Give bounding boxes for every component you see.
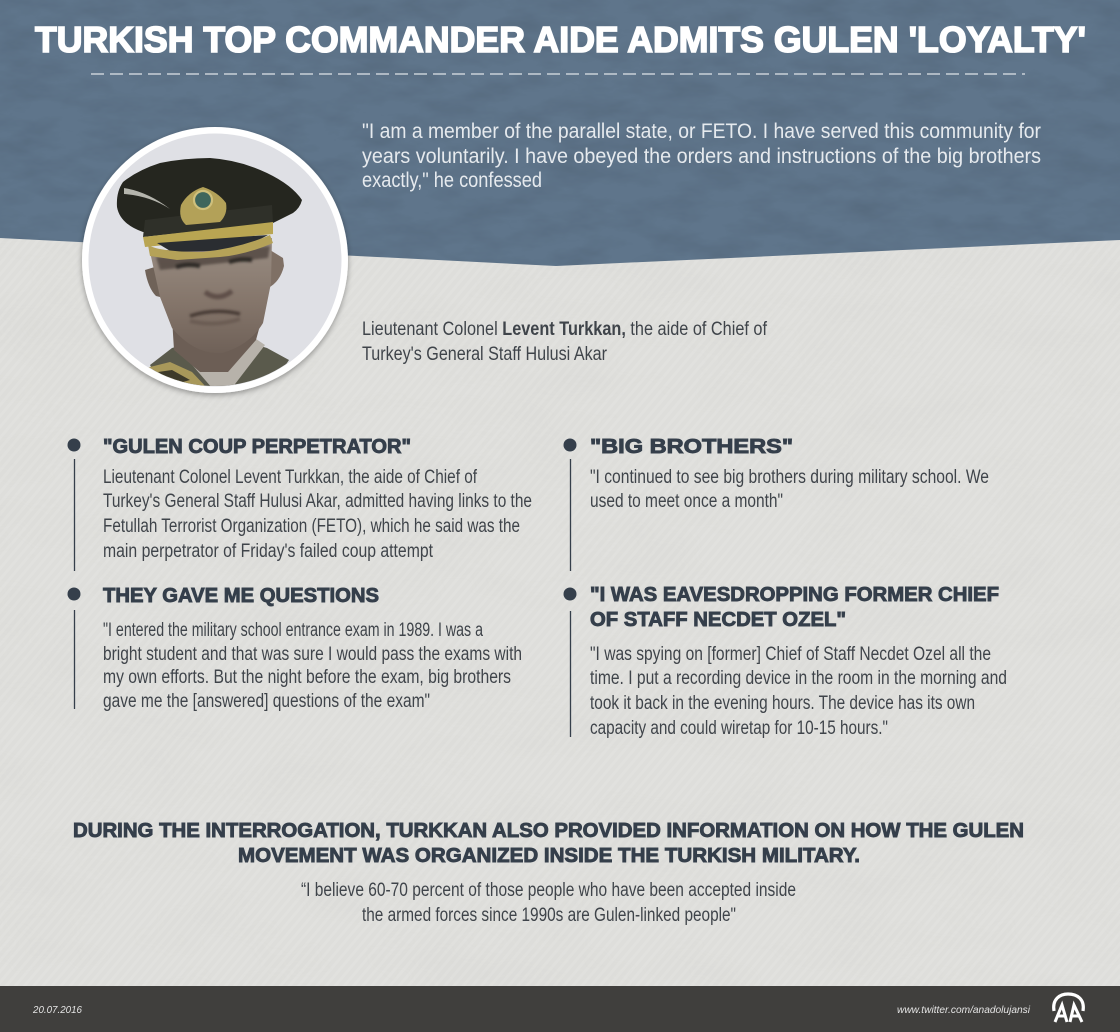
body text: capacity and could wiretap for 10-15 hours." [590, 718, 888, 739]
body text: used to meet once a month" [590, 491, 783, 512]
heading: "BIG BROTHERS" [590, 436, 793, 458]
body text [590, 467, 989, 512]
head [150, 238, 272, 340]
uniform shoulders [150, 347, 289, 386]
bullet marker [68, 588, 80, 600]
body text: Lieutenant Colonel Levent Turkkan, the aide of Chief of [103, 467, 478, 488]
body text: my own efforts. But the night before the exam, big brothers [103, 667, 511, 688]
twitter url: www.twitter.com/anadolujansi [897, 1005, 1031, 1016]
body text: took it back in the evening hours. The device has its own [590, 693, 975, 714]
section: Gulen coup perpetrator [68, 436, 532, 571]
neck [172, 328, 260, 372]
portrait caption: Turkey's General Staff Hulusi Akar [362, 344, 608, 365]
body text: Fetullah Terrorist Organization (FETO), which he said was the [103, 516, 520, 537]
date: 20.07.2016 [32, 1005, 82, 1016]
portrait caption: Lieutenant Colonel Levent Turkkan, the aide of Chief of [362, 319, 768, 340]
blue header band [0, 0, 1120, 270]
header quote: "I am a member of the parallel state, or FETO. I have served this community for [362, 120, 1041, 143]
cap badge [180, 187, 226, 225]
body text: "I entered the military school entrance exam in 1989. I was a [103, 620, 483, 641]
closing heading: MOVEMENT WAS ORGANIZED INSIDE THE TURKISH MILITARY. [238, 845, 860, 867]
footer bar [0, 986, 1120, 1032]
bullet marker [68, 438, 80, 452]
closing quote: “I believe 60-70 percent of those people who have been accepted inside [301, 880, 796, 901]
title dashed divider [91, 73, 1025, 75]
closing heading [73, 820, 1024, 867]
timeline stem [570, 611, 572, 737]
body text: "I continued to see big brothers during military school. We [590, 467, 989, 488]
header quote: years voluntarily. I have obeyed the orders and instructions of the big brothers [362, 145, 1041, 168]
portrait caption [362, 319, 768, 365]
header quote [362, 120, 1041, 192]
ears [145, 268, 160, 297]
body text: main perpetrator of Friday's failed coup attempt [103, 541, 434, 562]
body text [103, 620, 522, 712]
body text [590, 644, 1007, 739]
timeline stem [570, 459, 572, 571]
icon: Anadolu Agency logo [1054, 994, 1083, 1022]
body text: time. I put a recording device in the room in the morning and [590, 668, 1007, 689]
facial features [156, 246, 270, 324]
heading: "GULEN COUP PERPETRATOR" [103, 436, 411, 458]
heading [590, 584, 999, 631]
title: TURKISH TOP COMMANDER AIDE ADMITS GULEN 'LOYALTY' [35, 19, 1086, 60]
heading: OF STAFF NECDET OZEL" [590, 609, 846, 631]
section: eavesdropping [564, 584, 1007, 739]
body text [103, 467, 532, 562]
timeline stem [74, 610, 76, 709]
portrait: officer in peaked cap [82, 127, 348, 400]
body text: Turkey's General Staff Hulusi Akar, admitted having links to the [103, 491, 532, 512]
bullet marker [564, 588, 576, 600]
closing heading: DURING THE INTERROGATION, TURKKAN ALSO PROVIDED INFORMATION ON HOW THE GULEN [73, 820, 1024, 842]
body text: gave me the [answered] questions of the exam" [103, 691, 430, 712]
cap band [143, 222, 273, 247]
cap braid [148, 235, 273, 260]
section: big brothers [564, 436, 989, 571]
body text: "I was spying on [former] Chief of Staff Necdet Ozel all the [590, 644, 991, 665]
closing quote [301, 880, 796, 926]
body text: bright student and that was sure I would pass the exams with [103, 644, 522, 665]
header quote: exactly," he confessed [362, 169, 542, 192]
heading: THEY GAVE ME QUESTIONS [103, 585, 379, 607]
bullet marker [564, 438, 576, 452]
heading: "I WAS EAVESDROPPING FORMER CHIEF [590, 584, 999, 606]
closing quote: the armed forces since 1990s are Gulen-linked people" [362, 905, 736, 926]
cap crown [117, 158, 302, 232]
timeline stem [74, 459, 76, 571]
section: they gave me questions [68, 585, 522, 712]
